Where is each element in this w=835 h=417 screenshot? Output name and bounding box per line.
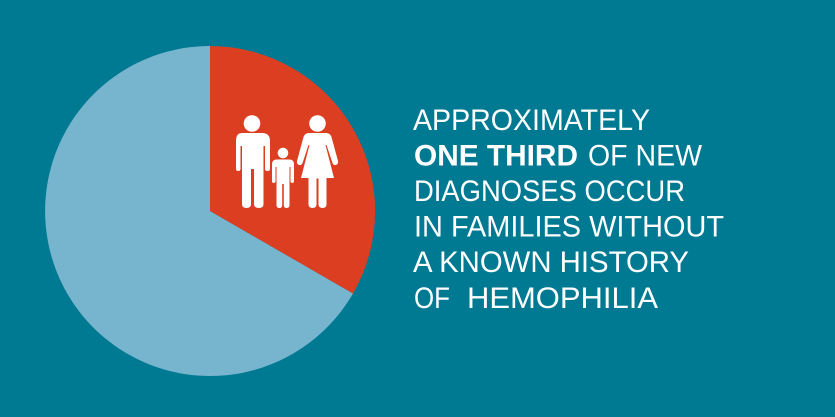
icon: family xyxy=(236,115,338,208)
text line 6: hemophilia: HEMOPHILIA xyxy=(467,282,658,315)
pie slice: one third xyxy=(210,46,375,293)
pie slice: two thirds xyxy=(45,46,353,376)
text line 4: IN FAMILIES WITHOUT xyxy=(414,210,724,244)
text line 3: DIAGNOSES OCCUR xyxy=(414,175,685,208)
text line 1: APPROXIMATELY xyxy=(413,104,650,137)
text line 5: A KNOWN HISTORY xyxy=(413,246,689,279)
icon: man xyxy=(236,115,270,208)
text line 2: continuation: OF NEW xyxy=(588,140,702,172)
text line 6: of: OF xyxy=(414,282,450,315)
text block: statistic statement xyxy=(413,104,724,315)
text line 2: emphasis: ONE THIRD xyxy=(414,140,578,172)
icon: child xyxy=(272,148,294,208)
icon: woman xyxy=(297,115,338,208)
pie chart xyxy=(45,46,375,376)
